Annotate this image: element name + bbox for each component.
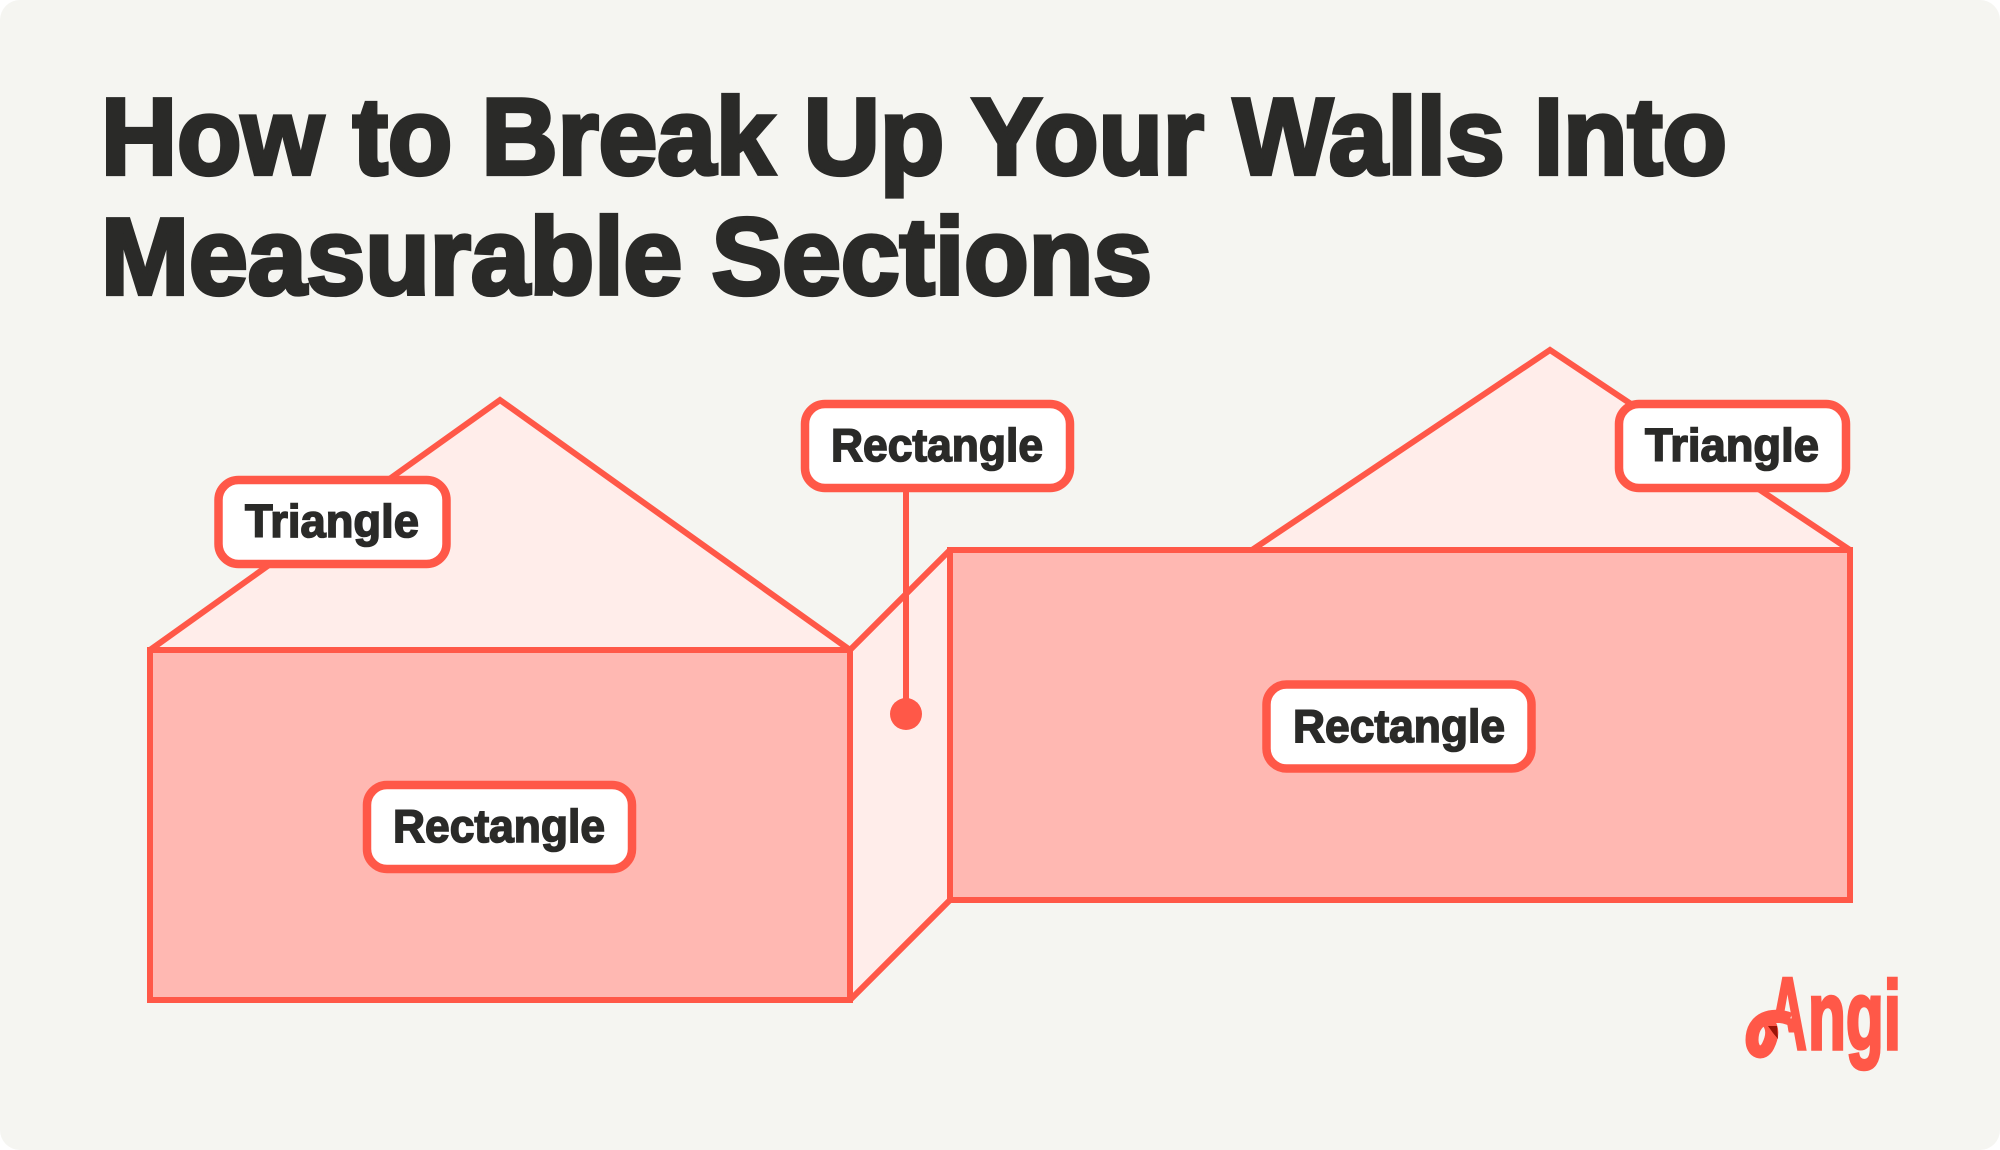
label: left triangle: Triangle: [245, 495, 419, 547]
left rectangle wall: [150, 650, 850, 1000]
label: left rectangle: [367, 785, 632, 869]
right rectangle wall: [950, 550, 1850, 900]
label: left rectangle: Rectangle: [393, 800, 605, 852]
label: right triangle: Triangle: [1645, 419, 1819, 471]
label: side wall rectangle: [805, 404, 1070, 488]
label: side wall rectangle: Rectangle: [831, 419, 1043, 471]
title: Measurable Sections: [101, 196, 1152, 318]
left triangle gable: [150, 400, 850, 650]
title: How to Break Up Your Walls Into: [101, 76, 1727, 198]
right triangle gable: [1252, 350, 1850, 550]
wall diagram: [150, 350, 1850, 1000]
connecting side wall: [850, 550, 950, 1000]
leader line with dot: [890, 490, 922, 730]
label: right rectangle: [1266, 684, 1532, 768]
logo: Angi: A: [1768, 956, 1807, 1071]
logo: Angi: ngi: [1808, 961, 1901, 1070]
label: right rectangle: Rectangle: [1293, 700, 1505, 752]
label: left triangle: [218, 480, 446, 564]
title: [101, 76, 1727, 318]
label: right triangle: [1619, 404, 1846, 488]
logo: Angi: [1746, 976, 1898, 1072]
